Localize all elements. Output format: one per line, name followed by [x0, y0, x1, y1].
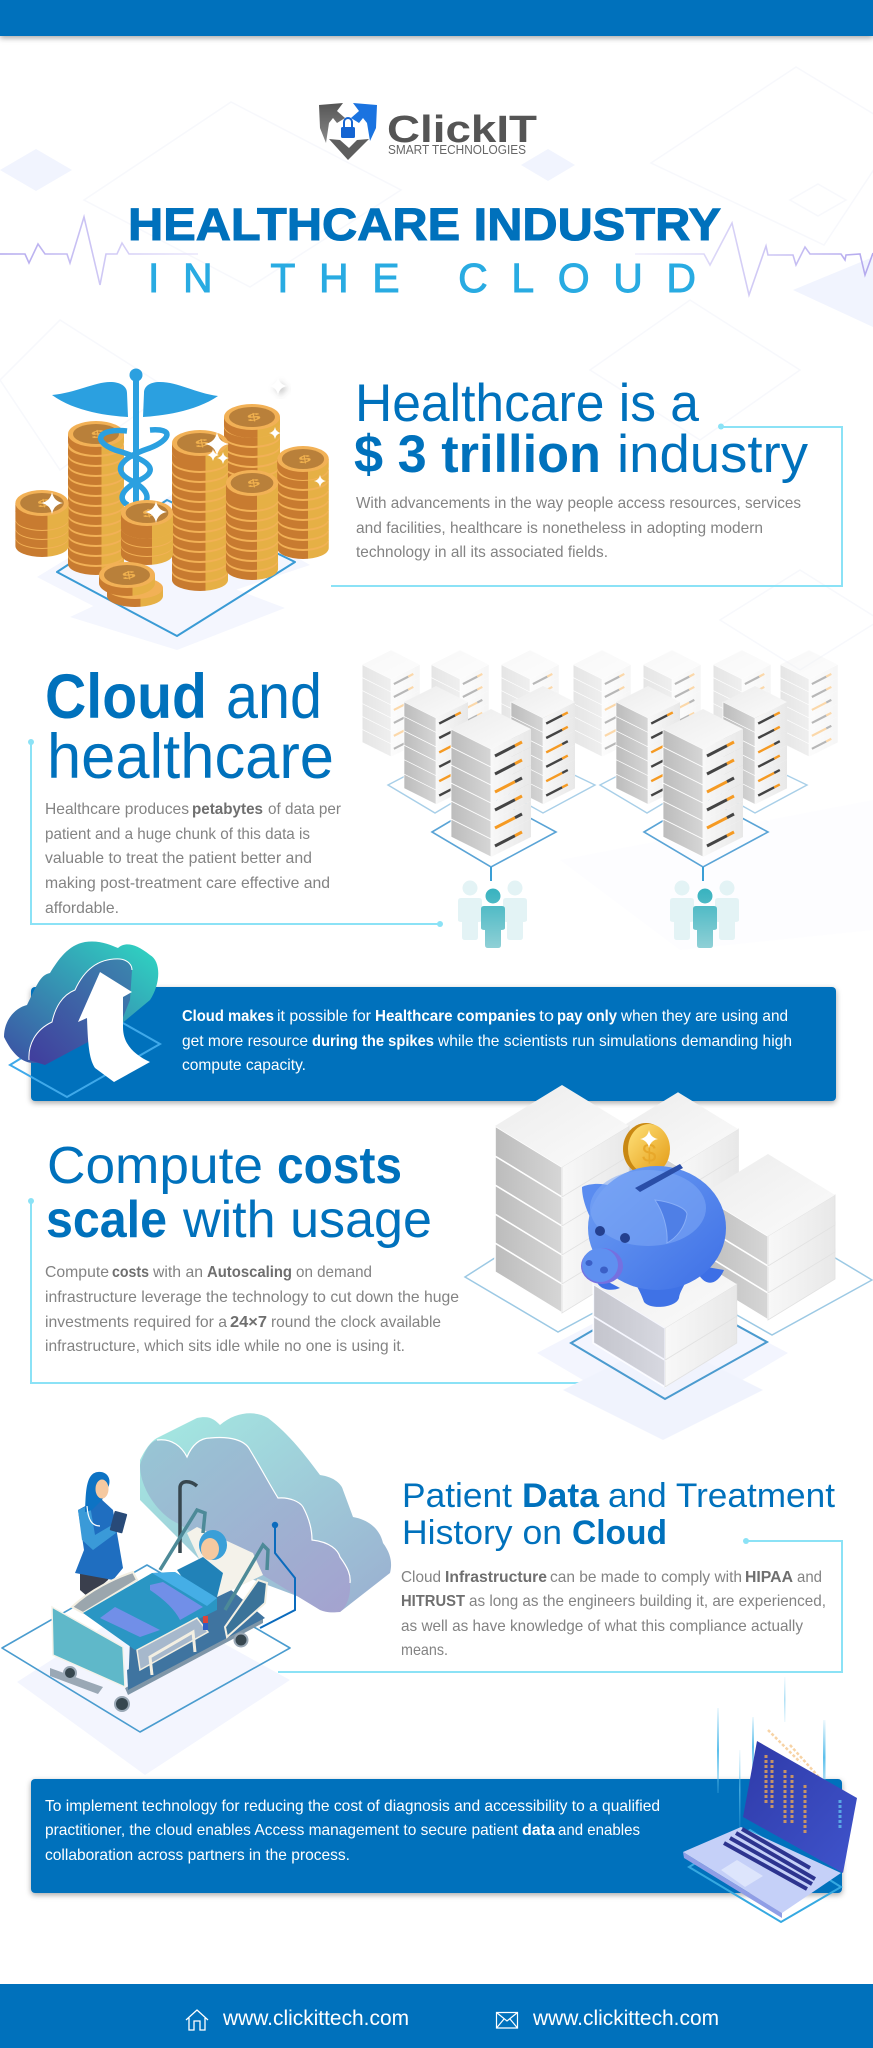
body text: Autoscaling	[207, 1264, 292, 1281]
banner text: data	[522, 1822, 555, 1839]
under-bed tray	[50, 1668, 103, 1694]
cluster two: mid towers	[616, 686, 787, 804]
title: HEALTHCARE INDUSTRY	[128, 199, 721, 250]
circuit line	[260, 1522, 295, 1628]
coin stack: far right: $	[297, 452, 312, 466]
frame dot	[718, 424, 724, 430]
nurse	[75, 1472, 127, 1597]
footboard	[52, 1607, 125, 1687]
floor diamond outline	[57, 500, 295, 636]
website link: www.clickittech.com	[222, 2007, 409, 2030]
body text	[401, 1569, 826, 1659]
coin stack: small centre	[121, 500, 173, 565]
icon: home	[186, 2010, 208, 2030]
floor outline	[689, 1830, 841, 1922]
cluster two: front tower	[663, 709, 743, 857]
rail: head left	[160, 1510, 205, 1570]
email link: www.clickittech.com	[532, 2007, 719, 2030]
frame line	[278, 1541, 842, 1672]
heartbeat line: right	[635, 223, 873, 295]
floor outlines	[465, 1215, 872, 1335]
keyboard	[724, 1829, 815, 1889]
banner text: To implement technology for reducing the cost of diagnosis and accessibility to a qualified	[45, 1798, 660, 1815]
floor outline	[2, 1565, 290, 1732]
body text: infrastructure, which sits idle while no one is using it.	[45, 1338, 405, 1355]
title	[128, 199, 721, 301]
heading: Data	[522, 1477, 600, 1515]
banner text: compute capacity.	[182, 1057, 306, 1074]
side panel and handle	[137, 1618, 208, 1670]
banner text: while the scientists run simulations demanding high	[437, 1033, 792, 1050]
body text: and	[797, 1569, 822, 1586]
heading	[46, 1137, 432, 1249]
coin stack: far right	[277, 446, 329, 559]
footer bar	[0, 1984, 873, 2048]
body text: making post-treatment care effective and	[45, 875, 330, 892]
icon: piggy bank	[581, 1164, 726, 1307]
heading	[402, 1477, 836, 1552]
heartbeat line: left	[0, 217, 198, 285]
body text: Compute	[45, 1264, 109, 1281]
icon: gold coin	[623, 1123, 670, 1175]
coin stack: tall centre	[172, 430, 228, 591]
lower frame	[125, 1618, 263, 1695]
floor outlines: cluster one	[388, 760, 595, 813]
body text: can be made to comply with	[550, 1569, 742, 1586]
panel: blue banner cloud makes it possible	[4, 942, 836, 1101]
coin stack: front right	[226, 470, 278, 580]
heading: Cloud	[572, 1514, 667, 1552]
body text: means.	[401, 1642, 448, 1659]
illustration: server clusters and users	[362, 650, 838, 948]
banner text: collaboration across partners in the process.	[45, 1847, 350, 1864]
coin pair: loose in front: $	[121, 568, 137, 582]
body text: HIPAA	[745, 1569, 793, 1586]
banner text	[182, 1008, 792, 1074]
illustration: piggy bank on server blocks	[465, 1085, 872, 1440]
body text: patient and a huge chunk of this data is	[45, 826, 310, 843]
logo	[319, 103, 537, 160]
body text: costs	[112, 1264, 149, 1281]
pillow	[187, 1527, 263, 1597]
coin stack: back right	[224, 404, 280, 496]
pale floor diamonds	[37, 490, 310, 650]
banner text: during the spikes	[312, 1033, 434, 1050]
heading: and Treatment	[608, 1477, 836, 1515]
cluster one: floor outline and connector	[432, 797, 556, 881]
coin stack: small centre: $	[141, 506, 156, 520]
heading: Cloud	[45, 662, 207, 732]
body text: Infrastructure	[445, 1569, 547, 1586]
body text: affordable.	[45, 900, 119, 917]
heading: Compute	[47, 1137, 263, 1195]
body text	[45, 1264, 459, 1355]
bed	[50, 1510, 268, 1711]
panel: patient data and treatment history on cloud	[278, 1477, 842, 1672]
pale floor diamond	[17, 1600, 290, 1775]
heading: costs	[277, 1137, 402, 1195]
frame dot	[28, 1198, 34, 1204]
heading: Healthcare is a	[355, 374, 700, 433]
body text	[45, 801, 342, 917]
banner text: to	[539, 1008, 554, 1025]
banner text: pay only	[557, 1008, 617, 1025]
coin stack: tall left	[68, 421, 124, 575]
body text	[356, 495, 801, 561]
heading: scale	[46, 1191, 167, 1249]
screen	[743, 1741, 857, 1873]
cluster one: mid towers	[404, 686, 575, 804]
banner text: practitioner, the cloud enables Access management to secure patient	[45, 1822, 519, 1839]
coin stack: front right: $	[246, 476, 261, 490]
body text: 24×7	[230, 1314, 267, 1331]
coin stack: tall left: $	[90, 427, 106, 441]
banner text: Cloud makes	[182, 1008, 274, 1025]
icon: users group one	[458, 880, 527, 948]
body text: With advancements in the way people access resources, services	[356, 495, 801, 512]
footboard inner	[72, 1572, 137, 1613]
screen code	[766, 1755, 840, 1835]
heading	[354, 374, 809, 484]
block tower: centre	[593, 1240, 737, 1387]
subtitle: IN THE CLOUD	[148, 255, 696, 301]
icon: users group two	[670, 880, 739, 948]
body text: of data per	[268, 801, 342, 818]
heading: with usage	[182, 1191, 432, 1249]
body text: valuable to treat the patient better and	[45, 850, 312, 867]
coin stack: back right: $	[246, 410, 262, 424]
body text: and facilities, healthcare is nonetheless in adopting modern	[356, 520, 763, 537]
IV pole	[180, 1482, 197, 1553]
wheels	[64, 1634, 248, 1711]
panel: healthcare is a $3 trillion industry	[331, 374, 842, 586]
body text: as long as the engineers building it, are experienced,	[469, 1593, 826, 1610]
banner text: and enables	[558, 1822, 640, 1839]
body text: technology in all its associated fields.	[356, 544, 608, 561]
block tower: left	[495, 1085, 629, 1313]
body text: petabytes	[192, 801, 263, 818]
banner text: get more resource	[182, 1033, 308, 1050]
illustration: coins and caduceus	[15, 368, 329, 650]
banner background	[31, 1779, 842, 1893]
heading: industry	[617, 425, 809, 484]
floating code	[768, 1730, 826, 1785]
heading: History on	[402, 1514, 562, 1552]
head section	[225, 1580, 267, 1637]
body text: Healthcare produces	[45, 801, 189, 818]
banner text	[45, 1798, 660, 1864]
icon: gold coin: $	[642, 1138, 657, 1168]
icon: shield with lock	[319, 103, 377, 160]
frame line	[31, 1201, 579, 1383]
block tower: right	[701, 1154, 835, 1320]
banner text: it possible for	[277, 1008, 372, 1025]
coin stack: small far left: $	[36, 496, 51, 510]
frame line	[31, 742, 440, 924]
panel: cloud and healthcare	[28, 662, 443, 927]
heading	[45, 662, 334, 792]
cluster one: front tower	[451, 709, 531, 857]
coin stack: small far left	[15, 490, 69, 557]
frame line	[331, 427, 842, 586]
frame dots	[28, 739, 443, 927]
body text: HITRUST	[401, 1593, 465, 1610]
heading: $ 3 trillion	[354, 425, 601, 484]
heading: Patient	[402, 1477, 513, 1515]
pale floor diamonds	[537, 1287, 788, 1440]
trackpad	[721, 1860, 763, 1887]
body text: infrastructure leverage the technology to cut down the huge	[45, 1289, 459, 1306]
panel: blue banner access management	[31, 1779, 842, 1893]
icon: caduceus	[52, 368, 218, 506]
sparkles	[41, 377, 326, 523]
heading: and	[226, 662, 322, 732]
cloud: front face	[140, 1438, 350, 1612]
panel: compute costs scale with usage	[28, 1137, 579, 1383]
block tower: back centre	[618, 1092, 738, 1219]
icon: mail	[496, 2012, 518, 2028]
heading: healthcare	[47, 722, 334, 792]
body text: investments required for a	[45, 1314, 227, 1331]
cloud: extruded back	[140, 1413, 391, 1612]
top blue bar	[0, 0, 873, 36]
illustration: patient in bed with nurse and cloud	[2, 1413, 391, 1775]
body text: as well as have knowledge of what this compliance actually	[401, 1618, 803, 1635]
banner background	[31, 987, 836, 1101]
coin pair: loose in front	[99, 562, 163, 607]
blanket	[83, 1572, 217, 1650]
back row of servers	[362, 650, 838, 757]
frame dot	[743, 1538, 749, 1544]
data light beams	[717, 1677, 826, 1830]
wordmark: ClickIT	[387, 109, 537, 151]
floor outlines: cluster two	[600, 760, 807, 813]
laptop base	[683, 1827, 841, 1913]
coin stack: tall centre: $	[194, 436, 210, 450]
cluster two: floor outline and connector	[644, 797, 768, 881]
body text: round the clock available	[271, 1314, 441, 1331]
icon: cloud with up arrow	[4, 942, 160, 1097]
patient	[177, 1530, 227, 1597]
body text: Cloud	[401, 1569, 441, 1586]
banner text: when they are using and	[620, 1008, 788, 1025]
banner text: Healthcare companies	[375, 1008, 536, 1025]
body text: with an	[152, 1264, 203, 1281]
background: faint diamond pattern	[0, 67, 873, 950]
tagline: SMART TECHNOLOGIES	[388, 142, 526, 157]
illustration: laptop with floating data	[683, 1677, 857, 1922]
body text: on demand	[296, 1264, 372, 1281]
